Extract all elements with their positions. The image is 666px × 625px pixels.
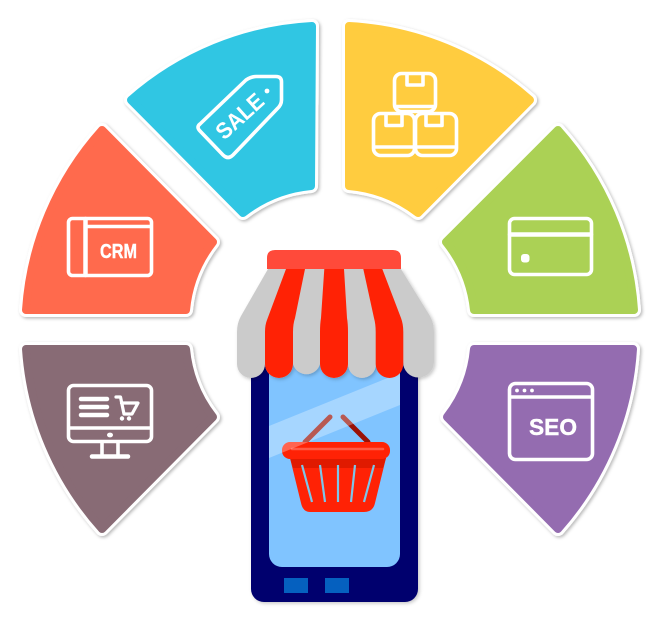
phone button right	[325, 578, 349, 593]
screen glare	[269, 373, 400, 458]
awning top bar	[267, 250, 401, 269]
phone screen	[269, 360, 400, 567]
awning grey base	[237, 269, 434, 378]
panel: crm (orange)	[26, 130, 213, 310]
shopping basket	[282, 417, 390, 512]
icon: stacked boxes	[374, 74, 456, 156]
icon: sale tag: SALE	[210, 88, 269, 144]
icon: seo browser window	[510, 384, 592, 460]
icon: desktop with shopping cart	[68, 386, 152, 456]
panel: online shop (brown)	[26, 349, 213, 529]
phone button left	[284, 578, 308, 593]
panel: payment card (green)	[446, 130, 634, 310]
panel: inventory boxes (yellow)	[349, 26, 530, 213]
awning	[237, 250, 434, 378]
awning red stripe left	[265, 269, 305, 378]
awning red stripe right	[363, 269, 403, 378]
awning red stripe centre	[320, 269, 348, 378]
icon: seo browser window: SEO	[529, 414, 577, 440]
icon: crm window: CRM	[100, 241, 137, 263]
mobile storefront illustration	[237, 250, 434, 602]
icon: crm window	[68, 218, 152, 276]
panel: seo (purple)	[447, 349, 633, 529]
phone body	[251, 340, 418, 602]
panel: sale tag (blue)	[131, 26, 312, 213]
icon: sale tag	[198, 76, 282, 158]
icon: credit card	[510, 218, 592, 274]
